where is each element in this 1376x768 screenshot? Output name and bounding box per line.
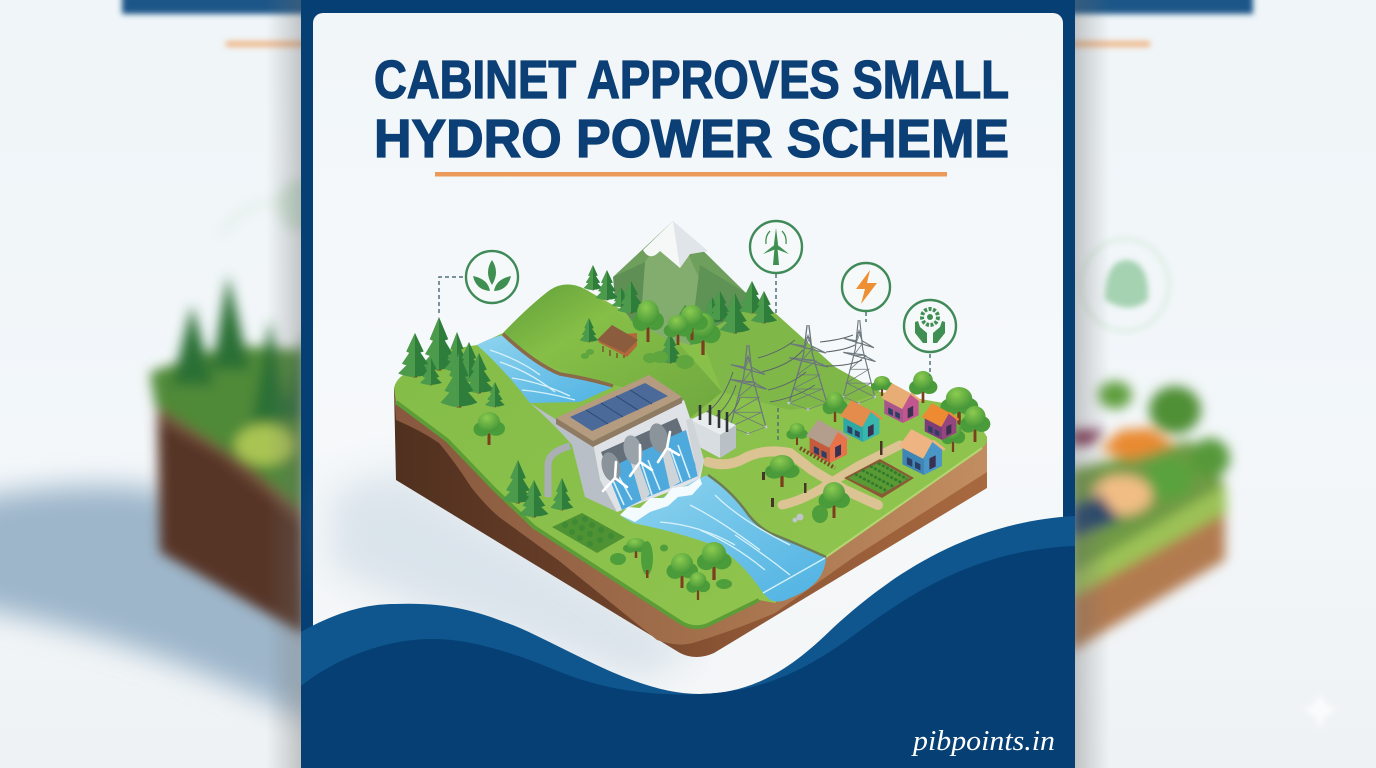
white card xyxy=(313,13,1063,713)
pines by the dam xyxy=(503,460,573,517)
hillside round trees xyxy=(581,300,721,369)
title: CABINET APPROVES SMALL xyxy=(374,50,1009,110)
vegetable patch xyxy=(552,513,625,553)
turbine bay recess xyxy=(601,418,696,505)
mountain snow cap xyxy=(643,221,708,268)
lighter wave band xyxy=(301,516,1075,768)
grass rim xyxy=(396,402,759,627)
blurred island, left xyxy=(150,179,318,635)
spillway water xyxy=(606,430,698,510)
pier walls xyxy=(630,418,704,502)
dam side wall xyxy=(530,403,617,512)
grass base xyxy=(394,284,987,627)
village trees xyxy=(786,371,990,452)
left pine forest xyxy=(398,317,505,445)
blurred title remnant, left xyxy=(122,0,307,47)
upper river xyxy=(477,334,613,403)
back meadow slope xyxy=(700,310,880,410)
icon: hands holding gear xyxy=(904,300,956,352)
back pine trees xyxy=(580,265,777,363)
blurred ground shadow xyxy=(0,486,310,722)
navy poster frame xyxy=(301,0,1075,768)
waterfall foam xyxy=(620,478,702,522)
icon: lightning bolt xyxy=(842,263,890,311)
icon: leaves xyxy=(466,251,518,303)
blurred title remnant, right xyxy=(1070,0,1253,47)
lower river xyxy=(620,475,826,602)
substation transformer xyxy=(690,405,736,458)
wooden cabin xyxy=(597,325,638,358)
icon: wind turbine xyxy=(750,221,802,273)
title underline xyxy=(435,172,947,176)
foreground trees xyxy=(610,455,850,600)
island soft shadow xyxy=(330,470,700,680)
soil block xyxy=(394,388,987,657)
website credit: pibpoints.in xyxy=(911,726,1055,757)
title xyxy=(374,50,1009,169)
blurred island, right xyxy=(1070,381,1230,652)
title: HYDRO POWER SCHEME xyxy=(374,109,1009,169)
turbines xyxy=(598,421,679,491)
isometric hydro power island xyxy=(394,221,990,657)
hydro dam xyxy=(530,375,704,512)
solar panels xyxy=(570,383,668,431)
power lines xyxy=(702,335,862,426)
callout connectors (dashed) xyxy=(439,274,930,440)
dark navy wave xyxy=(301,546,1075,768)
mountain xyxy=(613,221,780,345)
villagers xyxy=(762,441,882,507)
power pylons xyxy=(702,320,876,435)
green hill xyxy=(503,284,722,418)
tan footpath xyxy=(708,445,900,505)
sparkle watermark xyxy=(1302,692,1338,730)
village houses xyxy=(800,383,959,475)
dam front wall xyxy=(593,400,704,512)
blurred icon, right xyxy=(1081,239,1169,331)
penstock pipe xyxy=(548,446,570,497)
crop field xyxy=(844,459,914,498)
dam roof xyxy=(556,375,682,441)
